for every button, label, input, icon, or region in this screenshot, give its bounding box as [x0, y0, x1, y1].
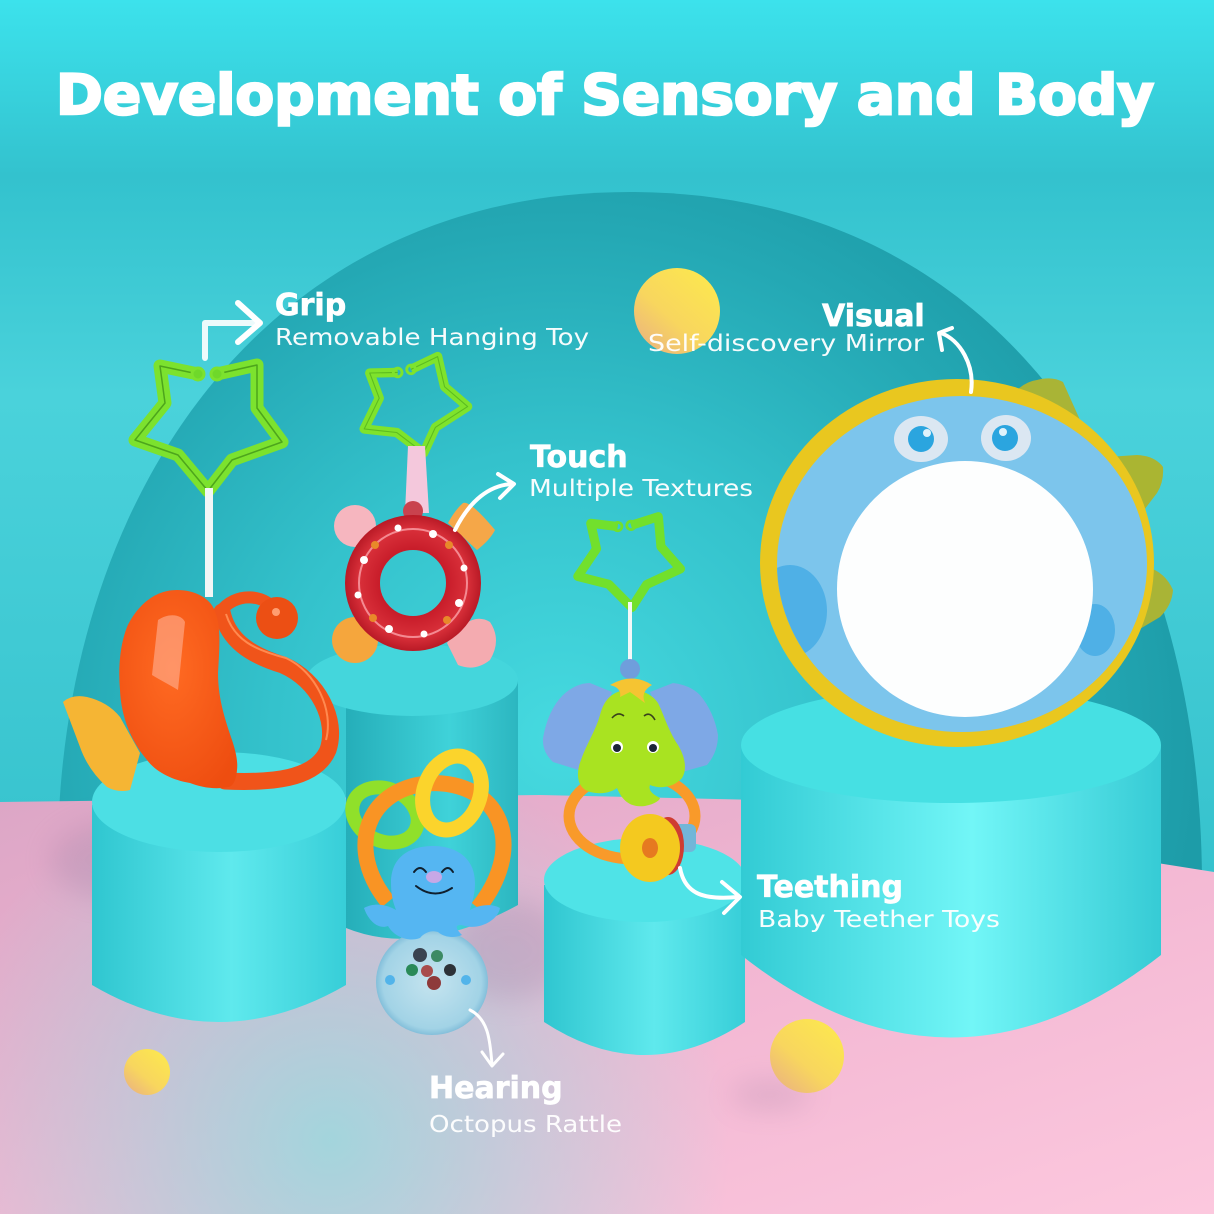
eye left	[894, 416, 948, 462]
label: visual	[648, 299, 925, 357]
whale tail	[63, 696, 140, 791]
floor	[0, 795, 1214, 1214]
star ring large	[135, 365, 282, 491]
label: teething	[757, 870, 1000, 933]
yellow ring	[413, 748, 491, 838]
arrow: hearing	[470, 1010, 503, 1066]
star ring medium	[352, 353, 476, 465]
ball: bottom right	[770, 1019, 844, 1093]
label: touch	[529, 440, 753, 502]
ears	[543, 683, 612, 772]
teethers	[334, 505, 376, 547]
toy: elephant teether	[543, 515, 718, 882]
whale highlight	[152, 615, 185, 690]
arrow: touch	[455, 474, 514, 530]
arrow: grip	[205, 303, 260, 358]
pedestal: left	[92, 752, 346, 1022]
rear teether	[668, 824, 696, 852]
toy: red ring	[332, 353, 496, 668]
toy: octopus rattle	[343, 748, 504, 1035]
octopus	[364, 846, 500, 940]
pedestal: back middle	[306, 644, 518, 939]
label: visual: Self-discovery Mirror	[648, 331, 925, 357]
beads	[385, 948, 471, 990]
fabric	[777, 396, 1147, 732]
star ring small	[573, 515, 683, 612]
flower teether	[620, 814, 680, 882]
arch	[58, 192, 1202, 880]
floor shadows	[50, 820, 810, 1109]
ring	[569, 773, 695, 859]
label: visual: Visual	[822, 299, 925, 334]
frame	[760, 379, 1154, 747]
label: hearing: Octopus Rattle	[429, 1112, 622, 1138]
crown	[610, 678, 652, 703]
ball: bottom left	[124, 1049, 170, 1095]
background wall	[0, 0, 1214, 880]
ribbon	[405, 446, 429, 513]
arrow: visual	[939, 328, 972, 392]
green ring	[343, 777, 427, 853]
whale body	[119, 590, 237, 788]
floor tint	[0, 800, 800, 1214]
orange ring	[365, 783, 504, 908]
label: grip: Removable Hanging Toy	[275, 325, 589, 351]
eye right	[981, 415, 1031, 461]
toy: hanging whale	[63, 365, 331, 791]
ring	[403, 501, 423, 521]
label: grip	[275, 288, 589, 351]
brows	[612, 714, 655, 720]
spikes	[1010, 378, 1080, 424]
label: touch: Multiple Textures	[529, 476, 753, 502]
octopus face	[414, 868, 453, 894]
pedestal: right	[741, 687, 1161, 1038]
label: teething: Baby Teether Toys	[758, 907, 1000, 933]
handle	[220, 597, 280, 615]
label: touch: Touch	[530, 440, 628, 475]
mirror	[837, 461, 1093, 717]
eyes	[611, 741, 623, 753]
label: hearing	[429, 1071, 622, 1138]
cheeks	[753, 565, 1115, 657]
ball: top	[634, 268, 720, 354]
title: Development of Sensory and Body	[56, 63, 1154, 127]
label: teething: Teething	[757, 870, 903, 905]
arrow: teething	[680, 868, 740, 913]
rattle globe	[376, 929, 488, 1035]
head	[578, 690, 685, 806]
pedestal: centre	[544, 838, 746, 1055]
toy: dinosaur mirror	[753, 378, 1173, 747]
label: grip: Grip	[275, 288, 346, 323]
label: hearing: Hearing	[429, 1071, 563, 1106]
